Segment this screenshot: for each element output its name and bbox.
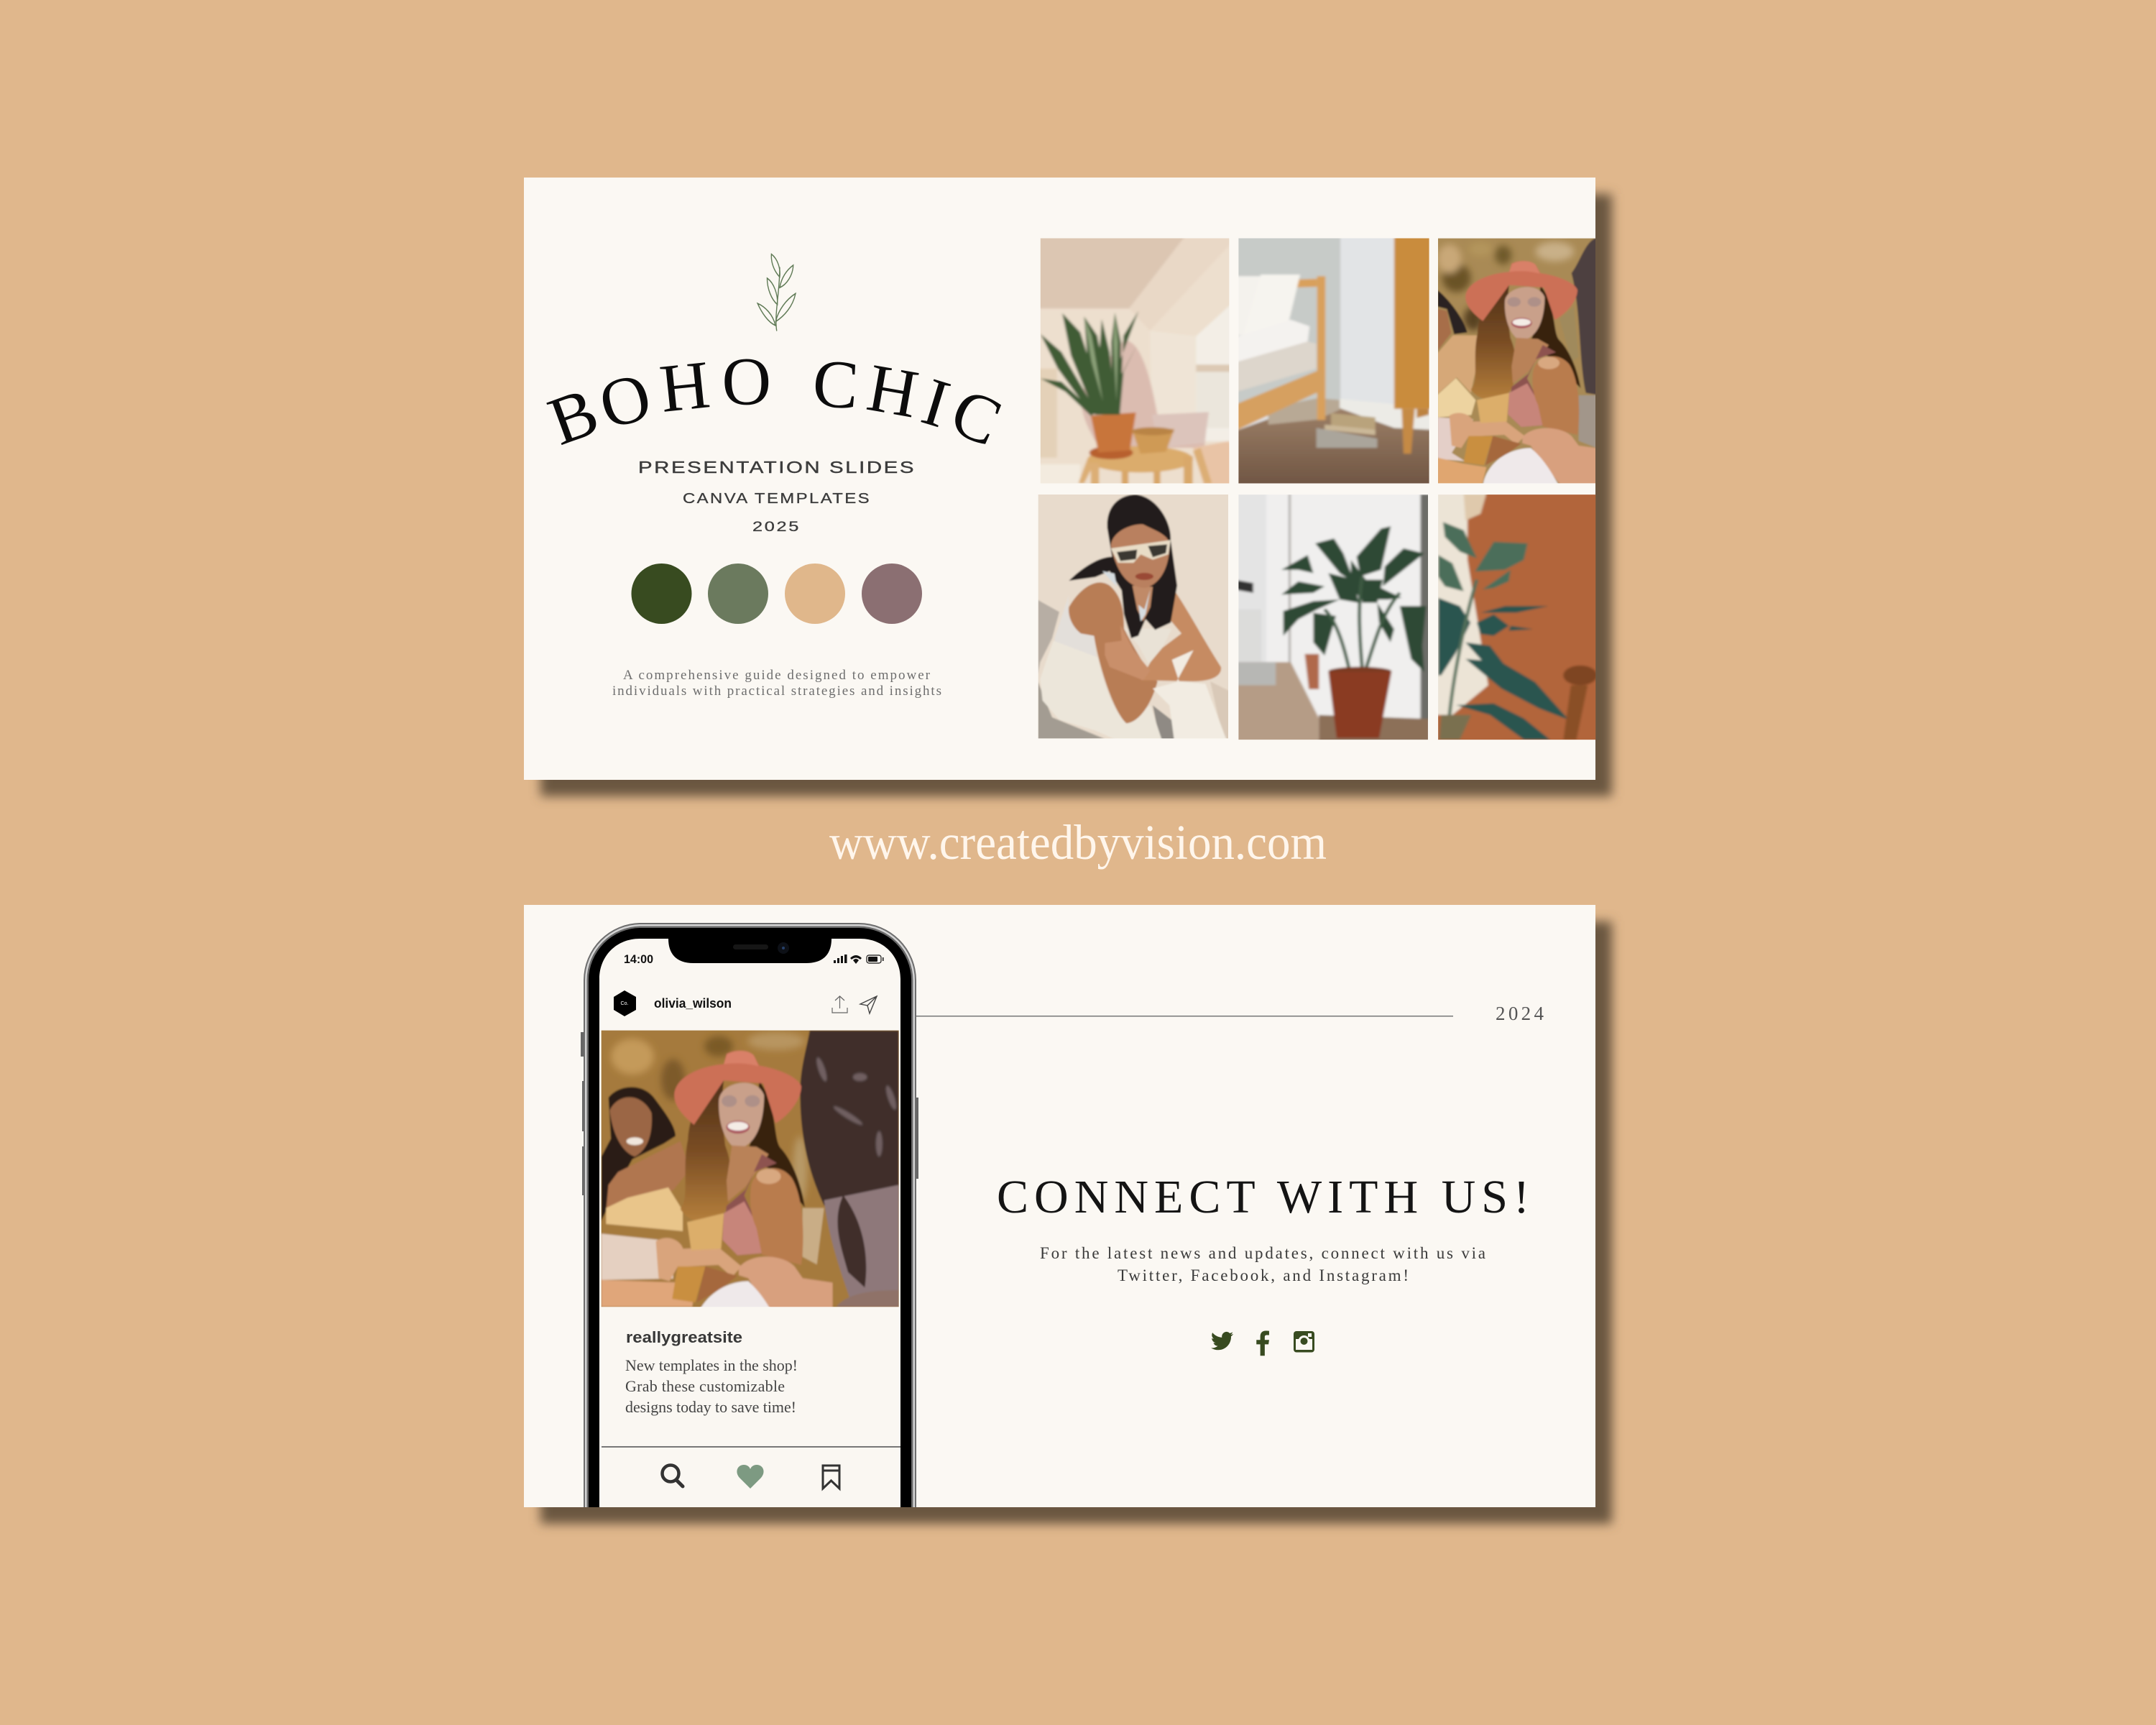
icon: twitter bbox=[1211, 1332, 1233, 1350]
photo: leaves on terracotta wall bbox=[1435, 492, 1599, 743]
icon: search bbox=[663, 1465, 683, 1486]
photo: woman in sunglasses bbox=[1036, 492, 1232, 741]
subtitle line two: CANVA TEMPLATES bbox=[683, 491, 871, 507]
website url: www.createdbyvision.com bbox=[829, 815, 1327, 870]
status bar time: 14:00 bbox=[624, 952, 653, 966]
panel: cover slide bbox=[524, 178, 1612, 796]
heading: CONNECT WITH US! bbox=[997, 1171, 1529, 1223]
phone mockup bbox=[581, 923, 918, 1507]
phone frame bbox=[584, 923, 916, 1507]
photo: potted plant hallway bbox=[1235, 492, 1434, 743]
social icons bbox=[1211, 1331, 1314, 1356]
panel: connect slide bbox=[524, 905, 1612, 1575]
body text: For the latest news and updates, connect with us via bbox=[1040, 1244, 1485, 1262]
year label: 2024 bbox=[1496, 1003, 1544, 1024]
post caption: designs today to save time! bbox=[625, 1398, 796, 1416]
post photo bbox=[599, 1029, 900, 1328]
connect slide shadow bbox=[540, 921, 1612, 1524]
bottom nav divider bbox=[602, 1446, 900, 1448]
icon: share bbox=[832, 996, 847, 1013]
post caption: New templates in the shop! bbox=[625, 1356, 798, 1374]
status bar icons bbox=[834, 954, 884, 964]
post caption: Grab these customizable bbox=[625, 1377, 785, 1395]
username: olivia_wilson bbox=[654, 996, 732, 1011]
icon: leaf sprig bbox=[757, 254, 796, 331]
post caption bbox=[625, 1356, 798, 1416]
phone screen bbox=[599, 939, 900, 1507]
icon: facebook bbox=[1256, 1331, 1269, 1356]
photo grid bbox=[1035, 234, 1605, 743]
cover slide card bbox=[524, 178, 1595, 780]
photo: bed and wardrobe bbox=[1235, 234, 1434, 487]
title: BOHO CHIC bbox=[539, 343, 1013, 461]
avatar badge bbox=[614, 990, 636, 1016]
description text: individuals with practical strategies and insights bbox=[612, 684, 941, 699]
icon: bookmark bbox=[823, 1466, 839, 1489]
cover slide shadow bbox=[540, 194, 1612, 796]
icon: heart bbox=[737, 1465, 764, 1489]
description text bbox=[612, 668, 941, 699]
photo: woman in hat bbox=[1435, 235, 1605, 487]
icon: instagram bbox=[1294, 1331, 1314, 1353]
phone side buttons bbox=[581, 1032, 918, 1195]
year: 2025 bbox=[752, 520, 801, 535]
icon: send bbox=[860, 996, 877, 1013]
colour palette bbox=[631, 564, 922, 624]
description text: A comprehensive guide designed to empower bbox=[623, 668, 931, 683]
body text bbox=[1040, 1244, 1485, 1284]
avatar badge: Co. bbox=[621, 1001, 628, 1006]
connect slide card bbox=[524, 905, 1595, 1507]
subtitle: PRESENTATION SLIDES bbox=[638, 458, 916, 477]
body text: Twitter, Facebook, and Instagram! bbox=[1118, 1266, 1409, 1284]
post author: reallygreatsite bbox=[626, 1328, 742, 1346]
photo: snake plant room bbox=[1035, 234, 1235, 487]
phone camera bbox=[733, 942, 789, 954]
